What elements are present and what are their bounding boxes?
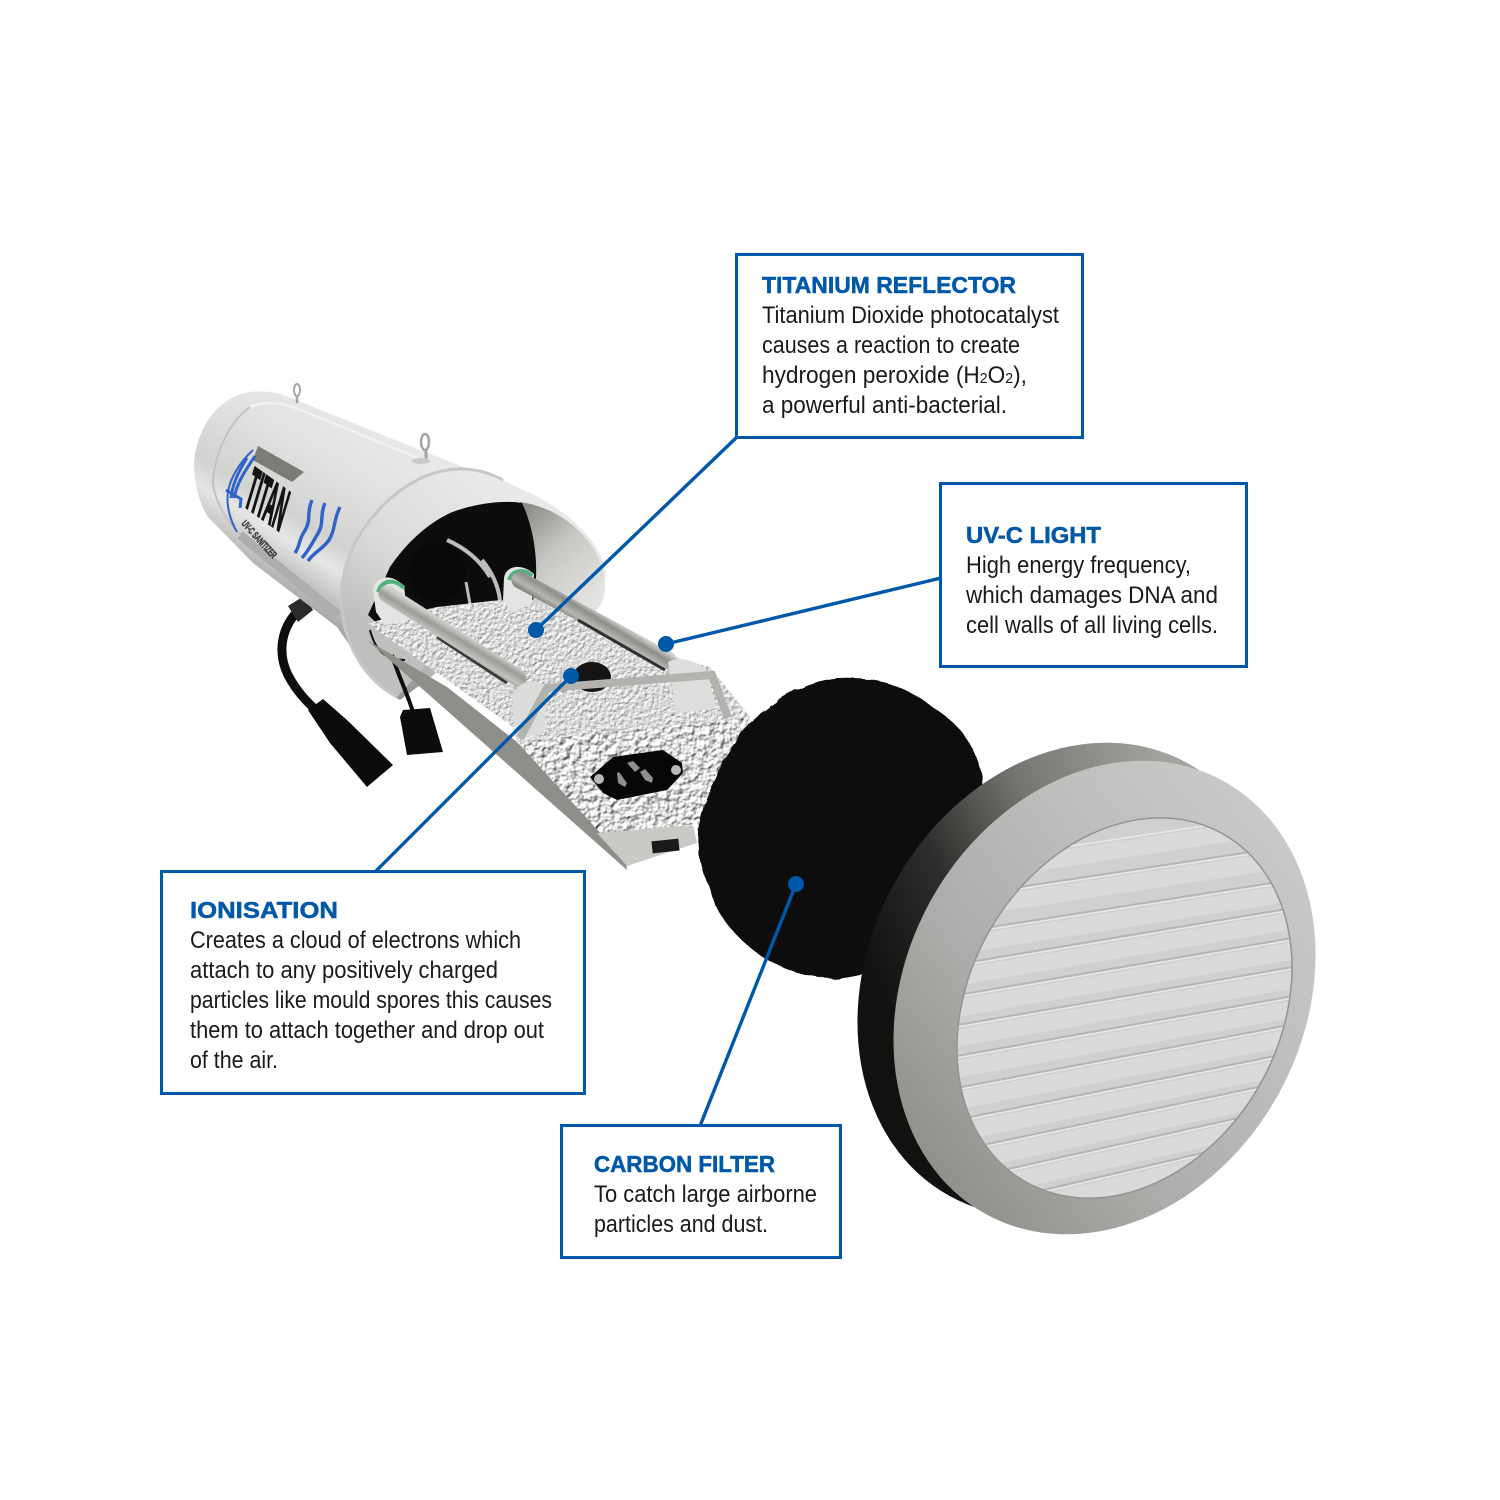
leader: titanium reflector bbox=[528, 437, 737, 638]
rear left holder bbox=[373, 577, 408, 625]
heading: UV-C light: UV-C LIGHT bbox=[966, 522, 1101, 548]
front hammered plate bbox=[517, 717, 750, 836]
leader: UV-C light bbox=[658, 578, 941, 652]
body text: titanium reflector: causes a reaction to create bbox=[762, 332, 1020, 359]
body text: carbon filter: particles and dust. bbox=[594, 1211, 768, 1238]
rear right holder bbox=[503, 567, 534, 612]
reflector tray bbox=[367, 600, 750, 870]
body text: ionisation bbox=[190, 927, 552, 1074]
bracket bbox=[520, 675, 728, 738]
body text: ionisation: particles like mould spores this causes bbox=[190, 987, 552, 1014]
logo: Titan branding: TITAN bbox=[239, 456, 295, 544]
carbon filter bbox=[698, 678, 990, 979]
louvre face bbox=[958, 818, 1292, 1198]
front holders bbox=[512, 681, 548, 740]
panel: UV-C light bbox=[940, 484, 1246, 666]
body text: titanium reflector: Titanium Dioxide photocatalyst bbox=[762, 302, 1059, 329]
body text: ionisation: Creates a cloud of electrons which bbox=[190, 927, 521, 954]
tray shadow under left lamp bbox=[437, 637, 507, 683]
body text: titanium reflector: a powerful anti-bacterial. bbox=[762, 392, 1007, 419]
socket bbox=[590, 750, 683, 800]
body text: ionisation: them to attach together and drop out bbox=[190, 1017, 544, 1044]
body text: UV-C light: High energy frequency, bbox=[966, 552, 1191, 579]
leader: ionisation bbox=[376, 668, 579, 871]
logo: Titan branding: UV-C SANITIZER bbox=[239, 519, 279, 561]
body text: titanium reflector bbox=[762, 302, 1059, 419]
right lamp bbox=[520, 580, 668, 660]
heading: carbon filter: CARBON FILTER bbox=[594, 1151, 775, 1177]
panel: ionisation bbox=[162, 872, 584, 1094]
tray side wall bbox=[367, 640, 627, 870]
ioniser knob bbox=[573, 662, 611, 692]
left lamp bbox=[387, 594, 518, 678]
body text: UV-C light: cell walls of all living cells. bbox=[966, 612, 1218, 639]
end tab bbox=[597, 825, 697, 866]
duct housing bbox=[194, 391, 523, 700]
heading: ionisation: IONISATION bbox=[190, 897, 338, 923]
panel: titanium reflector bbox=[736, 254, 1082, 438]
heading: titanium reflector: TITANIUM REFLECTOR bbox=[762, 272, 1016, 298]
body text: carbon filter bbox=[594, 1181, 817, 1238]
product illustration: exploded air sanitizer bbox=[194, 383, 1316, 1234]
body text: UV-C light bbox=[965, 552, 1218, 639]
upper reflector surface bbox=[367, 600, 750, 742]
logo: Titan branding bbox=[226, 446, 340, 561]
body text: UV-C light: which damages DNA and bbox=[965, 582, 1218, 609]
UV-C lamps and holders bbox=[373, 567, 728, 740]
power cord with plug bbox=[282, 596, 393, 787]
leader: carbon filter bbox=[700, 876, 804, 1126]
hood and opening bbox=[341, 469, 606, 697]
body text: titanium reflector: hydrogen peroxide (H2O2), bbox=[762, 362, 1027, 389]
body text: ionisation: of the air. bbox=[190, 1047, 278, 1074]
fan interior bbox=[368, 502, 536, 640]
panel: carbon filter bbox=[562, 1126, 840, 1258]
vent front ring bbox=[811, 685, 1398, 1310]
vent back ring bbox=[775, 667, 1362, 1292]
body text: carbon filter: To catch large airborne bbox=[594, 1181, 817, 1208]
small power lead bbox=[370, 630, 443, 755]
eye bolts bbox=[294, 384, 430, 464]
body text: ionisation: attach to any positively charged bbox=[190, 957, 498, 984]
louvred vent cap bbox=[857, 742, 1316, 1234]
